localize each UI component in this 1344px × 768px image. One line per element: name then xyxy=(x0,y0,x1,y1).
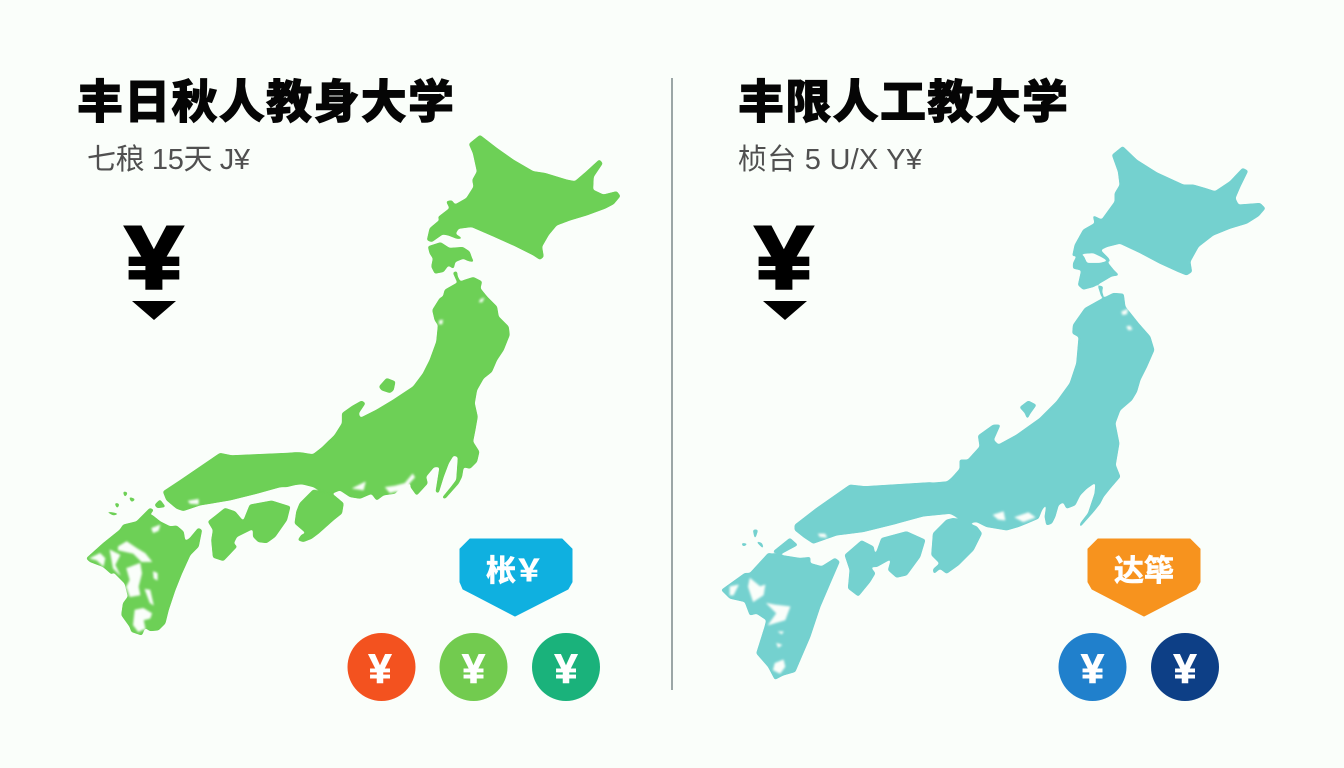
callout: blue: 枨￥ xyxy=(486,555,544,588)
panel: left xyxy=(77,76,620,701)
Honshu north xyxy=(930,293,1154,486)
western Honshu, Shikoku, Kyushu xyxy=(722,470,1010,679)
right heading: 丰限人工教大学 xyxy=(738,76,1068,128)
panel: right xyxy=(722,76,1265,701)
callout: blue xyxy=(460,539,572,616)
coin: orange-red xyxy=(348,633,416,701)
Honshu south coast xyxy=(960,460,1120,530)
right subtitle: 桢台 5 U/X Y¥ xyxy=(738,143,923,176)
map: Japan teal xyxy=(722,147,1265,679)
coin: navy: ¥ xyxy=(1174,646,1197,692)
callout: orange: 达筚 xyxy=(1114,555,1174,588)
coin: teal green xyxy=(532,633,600,701)
left subtitle: 七稂 15天 J¥ xyxy=(87,143,251,176)
coin: green xyxy=(440,633,508,701)
callout: orange xyxy=(1088,539,1200,616)
Hokkaido xyxy=(1073,147,1265,297)
coin: teal green: ¥ xyxy=(555,646,578,692)
left heading: 丰日秋人教身大学 xyxy=(77,76,454,128)
icon: yen with down arrow: ¥ xyxy=(756,209,812,308)
coin: green: ¥ xyxy=(462,646,485,692)
western Honshu, Shikoku, Kyushu xyxy=(87,440,343,635)
Honshu north xyxy=(280,277,509,500)
coin: blue xyxy=(1058,633,1126,701)
coin: navy xyxy=(1151,633,1219,701)
Hokkaido xyxy=(427,135,620,282)
coin: orange-red: ¥ xyxy=(369,646,392,692)
coin: blue: ¥ xyxy=(1081,646,1104,692)
icon: yen with down arrow: ¥ xyxy=(126,209,182,308)
map: Japan green xyxy=(87,135,620,635)
